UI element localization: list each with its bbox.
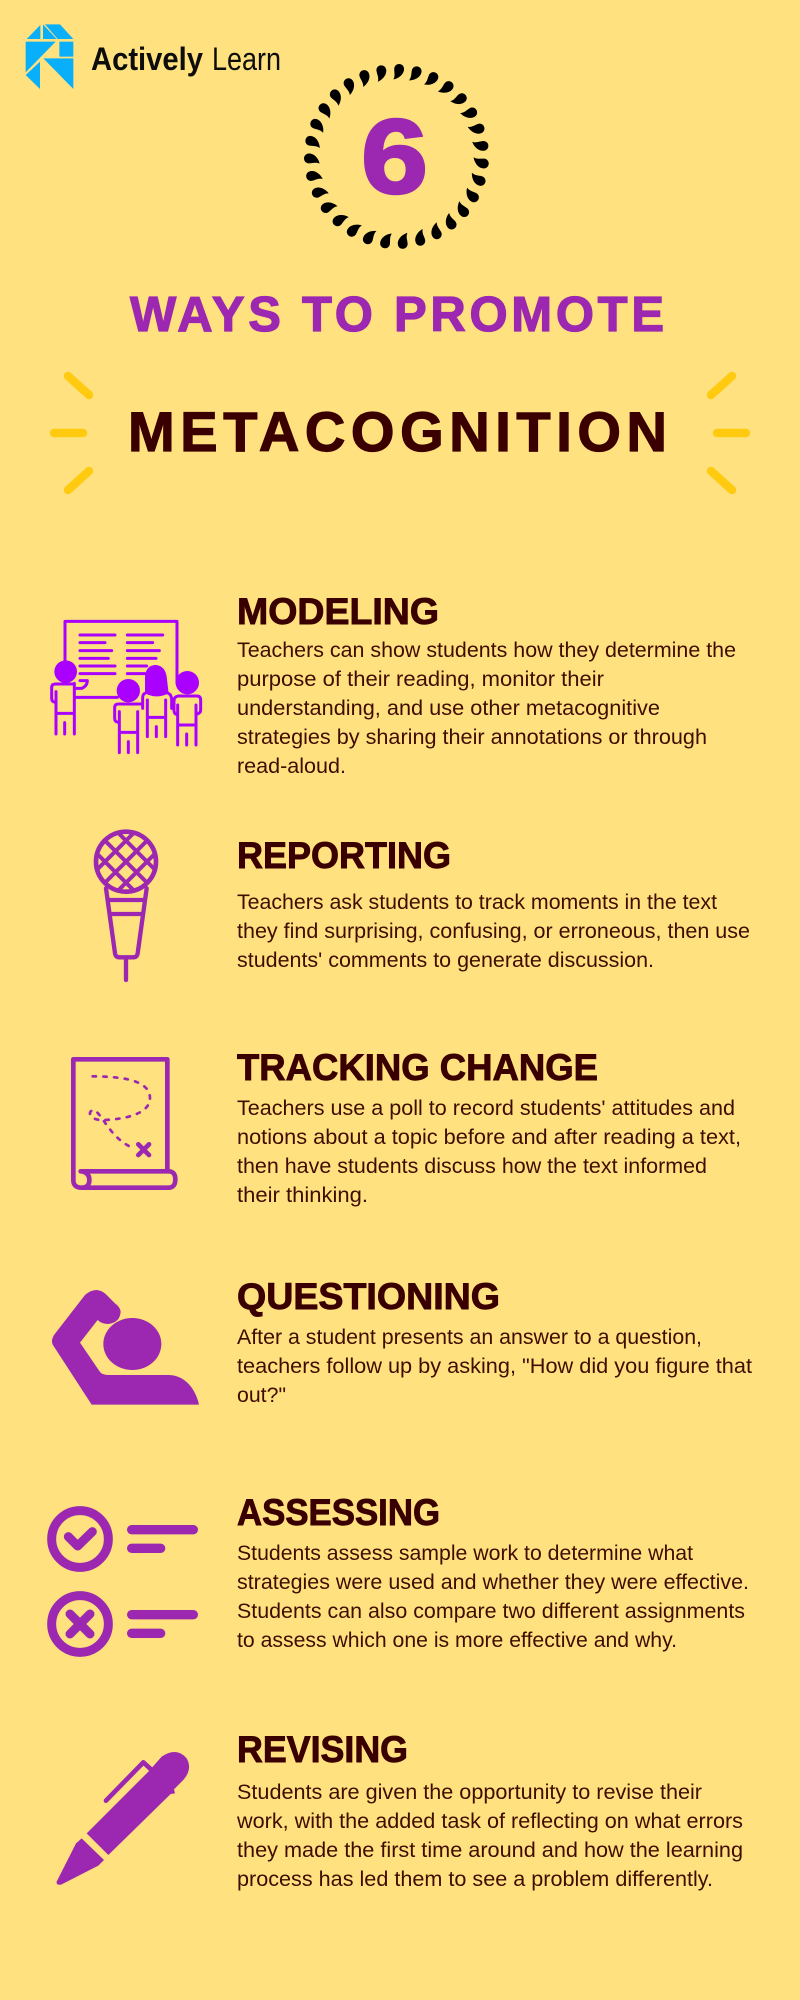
drop ring — [304, 64, 489, 249]
body text: they find surprising, confusing, or erroneous, then use — [237, 920, 750, 943]
body text: Students are given the opportunity to revise their — [237, 1781, 702, 1804]
body text: notions about a topic before and after reading a text, — [237, 1126, 741, 1149]
body text: out?" — [237, 1384, 286, 1407]
panel: tracking change — [73, 1046, 741, 1207]
rays right — [711, 376, 746, 490]
icon: teacher and students at board — [52, 621, 201, 753]
body text: then have students discuss how the text informed — [237, 1155, 707, 1178]
icon: pen — [57, 1752, 189, 1885]
body text: Teachers use a poll to record students' attitudes and — [237, 1097, 735, 1120]
icon: check and cross list — [52, 1511, 193, 1652]
icon: microphone — [94, 829, 158, 982]
logo wordmark: Actively — [91, 41, 203, 77]
body text: students' comments to generate discussion. — [237, 949, 654, 972]
logo wordmark: Learn — [212, 41, 281, 77]
body text: read-aloud. — [237, 755, 346, 778]
body text — [237, 1542, 749, 1652]
heading: TRACKING CHANGE — [237, 1046, 598, 1088]
body text: they made the first time around and how the learning — [237, 1839, 743, 1862]
panel: assessing — [52, 1491, 749, 1652]
panel: reporting — [94, 829, 749, 982]
heading: QUESTIONING — [237, 1275, 500, 1317]
panel: questioning — [52, 1275, 752, 1407]
person: student 2 — [143, 665, 172, 737]
heading: metacognition: METACOGNITION — [128, 400, 667, 463]
heading: ASSESSING — [237, 1491, 440, 1533]
panel: revising — [57, 1728, 743, 1891]
heading: MODELING — [237, 590, 439, 632]
rays left — [54, 376, 89, 490]
icon: logo mark — [26, 24, 73, 89]
panel: modeling — [52, 590, 736, 778]
body text: strategies by sharing their annotations or through — [237, 726, 707, 749]
body text: their thinking. — [237, 1184, 368, 1207]
body text: strategies were used and whether they were effective. — [237, 1571, 749, 1594]
body text: Teachers can show students how they determine the — [237, 639, 736, 662]
heading: REVISING — [237, 1728, 408, 1770]
body text: Teachers ask students to track moments in the text — [237, 891, 717, 914]
body text: work, with the added task of reflecting on what errors — [236, 1810, 743, 1833]
body text: to assess which one is more effective and why. — [237, 1629, 677, 1652]
title: metacognition with rays — [54, 376, 746, 490]
body text — [237, 639, 736, 778]
icon: treasure map scroll — [73, 1059, 175, 1188]
body text: understanding, and use other metacognitive — [237, 697, 660, 720]
body text — [237, 1326, 752, 1407]
body text: teachers follow up by asking, "How did you figure that — [237, 1355, 752, 1378]
body text: After a student presents an answer to a question, — [237, 1326, 702, 1349]
icon: student raising hand — [52, 1290, 199, 1405]
logo: Actively Learn — [26, 24, 281, 89]
title line: ways to promote: WAYS TO PROMOTE — [130, 288, 664, 342]
body text — [236, 1781, 743, 1891]
heading: REPORTING — [237, 834, 451, 876]
body text: Students assess sample work to determine what — [237, 1542, 693, 1565]
body text: process has led them to see a problem differently. — [237, 1868, 713, 1891]
body text — [237, 1097, 741, 1207]
body text: purpose of their reading, monitor their — [237, 668, 604, 691]
person: student 3 — [174, 671, 201, 745]
badge: number 6 in drop ring — [304, 64, 489, 249]
person: teacher — [52, 660, 87, 734]
body text: Students can also compare two different assignments — [237, 1600, 745, 1623]
numeral 6: 6 — [361, 98, 428, 216]
person: student 1 — [115, 679, 142, 753]
body text — [237, 891, 750, 972]
